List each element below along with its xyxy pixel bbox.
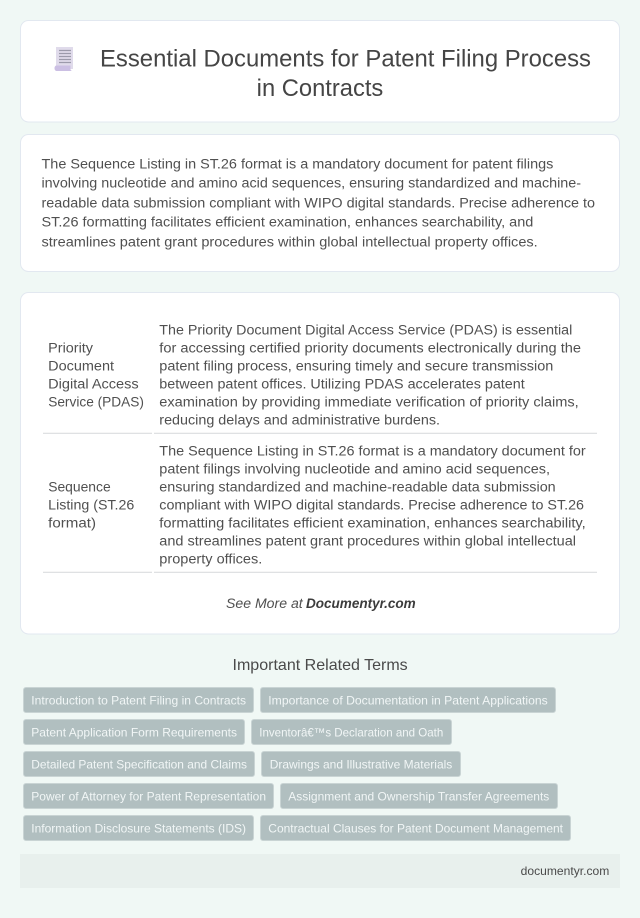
- chip: Drawings and Illustrative Materials: [270, 757, 452, 771]
- row description: PDAS: for accessing certified priority documents electronically during the: [159, 340, 581, 356]
- title: Essential Documents for Patent Filing Process: [100, 47, 591, 73]
- chip: [24, 816, 254, 840]
- title: in Contracts: [257, 76, 383, 102]
- row description: Sequence Listing: ensuring standardized and machine-readable data submission: [159, 479, 556, 495]
- chip: [24, 752, 254, 776]
- row description: PDAS: between patent offices. Utilizing PDAS accelerates patent: [159, 376, 525, 392]
- chip: Assignment and Ownership Transfer Agreements: [288, 789, 549, 803]
- row description: PDAS: patent filing process, ensuring timely and secure transmission: [159, 358, 553, 374]
- row label: Sequence Listing: Sequence: [48, 479, 111, 495]
- footer: documentyr.com: [521, 864, 609, 878]
- table row: PDAS: [48, 322, 581, 428]
- chip: [280, 784, 558, 808]
- link: see more: [226, 596, 416, 612]
- row label: PDAS: Priority: [48, 340, 94, 356]
- text block: intro paragraph: ST.26 formatting facilitates efficient examination, enhances searchability, and: [42, 215, 533, 231]
- text block: intro paragraph: streamlines patent grant procedures within global intellectual property offices.: [42, 234, 538, 250]
- chip: [262, 752, 460, 776]
- panel: related term chips: [24, 688, 570, 840]
- panel: document table: [20, 292, 620, 634]
- chip: Contractual Clauses for Patent Document Management: [268, 821, 564, 835]
- panel: title header: [20, 20, 620, 122]
- chip: Patent Application Form Requirements: [31, 725, 237, 739]
- chip: [260, 688, 556, 712]
- chip: Information Disclosure Statements (IDS): [31, 821, 246, 835]
- row description: Sequence Listing: property offices.: [159, 551, 262, 567]
- row description: PDAS: reducing delays and administrative burdens.: [159, 412, 440, 428]
- link: see more: Documentyr.com: [306, 596, 416, 612]
- chip: [252, 720, 452, 744]
- row label: Sequence Listing: Listing (ST.26: [48, 497, 134, 513]
- row label: PDAS: Service (PDAS): [48, 394, 144, 410]
- chip: [24, 720, 244, 744]
- row label: PDAS: Document: [48, 358, 114, 374]
- row label: PDAS: Digital Access: [48, 376, 139, 392]
- row description: Sequence Listing: compliant with WIPO digital standards. Precise adherence to ST.26: [159, 497, 584, 513]
- chip: Power of Attorney for Patent Representation: [31, 789, 266, 803]
- chip: Introduction to Patent Filing in Contracts: [31, 693, 246, 707]
- row description: PDAS: [159, 322, 581, 428]
- row description: PDAS: examination by providing immediate verification of priority claims,: [159, 394, 579, 410]
- icon: document scroll: [54, 47, 73, 71]
- footer: [20, 854, 620, 888]
- row label: Sequence Listing: [48, 479, 134, 531]
- chip: Detailed Patent Specification and Claims: [31, 757, 247, 771]
- link: see more: See More at: [226, 596, 304, 612]
- row description: Sequence Listing: patent filings involving nucleotide and amino acid sequences,: [159, 461, 550, 477]
- row description: Sequence Listing: formatting facilitates efficient examination, enhances searchability,: [159, 515, 586, 531]
- row description: Sequence Listing: [159, 443, 586, 567]
- text block: intro paragraph: The Sequence Listing in ST.26 format is a mandatory document for patent filings: [42, 156, 553, 172]
- chip: Importance of Documentation in Patent Applications: [268, 693, 548, 707]
- text block: intro paragraph: involving nucleotide and amino acid sequences, ensuring standardized and machine-: [42, 176, 581, 192]
- table row: Sequence Listing: [48, 443, 586, 567]
- chip: [260, 816, 570, 840]
- text block: intro paragraph: readable data submission compliant with WIPO digital standards. Precise adherence to: [42, 195, 595, 211]
- panel: intro summary: [20, 134, 620, 272]
- chip: [24, 784, 274, 808]
- row label: Sequence Listing: format): [48, 515, 96, 531]
- row description: PDAS: The Priority Document Digital Access Service (PDAS) is essential: [159, 322, 572, 338]
- row description: Sequence Listing: The Sequence Listing in ST.26 format is a mandatory document for: [159, 443, 586, 459]
- title: [100, 47, 591, 102]
- text block: intro paragraph: [42, 156, 595, 250]
- heading: important related terms: Important Related Terms: [232, 657, 408, 674]
- chip: [24, 688, 254, 712]
- row description: Sequence Listing: and streamlines patent grant procedures within global intellectual: [159, 533, 576, 549]
- row label: PDAS: [48, 340, 144, 410]
- chip: Inventorâ€™s Declaration and Oath: [259, 725, 443, 739]
